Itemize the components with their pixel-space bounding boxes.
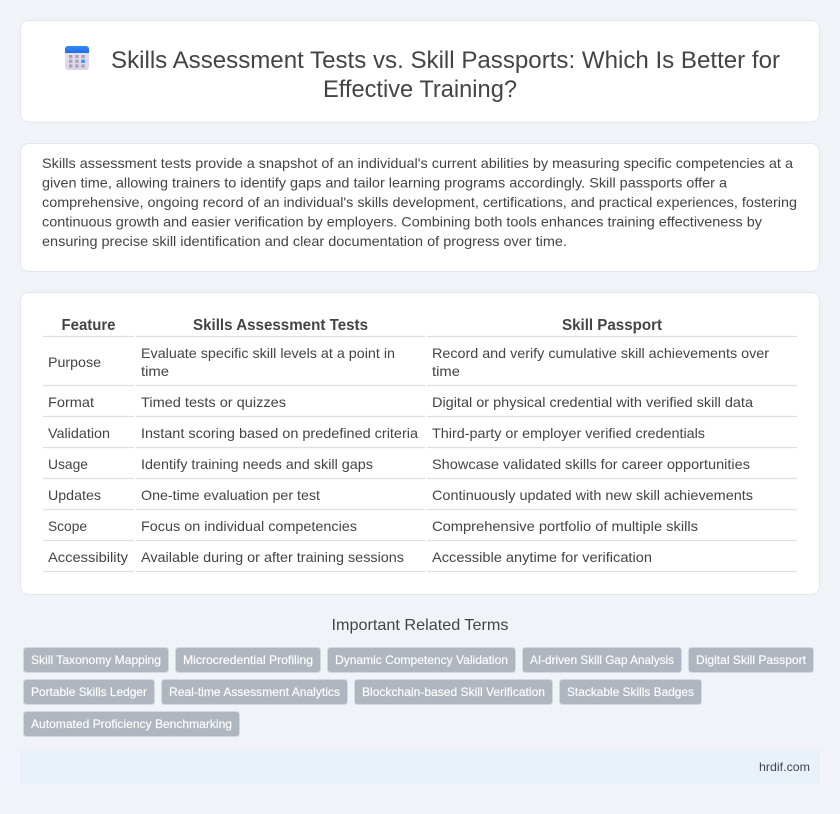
related terms tags: Real-time Assessment Analytics: [169, 685, 340, 699]
table header row: Skill Passport: [562, 317, 662, 334]
row: format: Digital or physical credential with verified skill data: [432, 394, 753, 410]
intro paragraph: comprehensive, ongoing record of an individual's skills development, certifications, and practical experiences, fostering: [42, 194, 797, 210]
row: updates: Continuously updated with new skill achievements: [432, 487, 753, 503]
row: scope: Comprehensive portfolio of multiple skills: [432, 518, 698, 534]
row: accessibility: Available during or after training sessions: [141, 549, 404, 565]
row: scope: [48, 518, 698, 534]
row: format: Timed tests or quizzes: [141, 394, 286, 410]
related terms tags: Stackable Skills Badges: [567, 685, 694, 699]
intro paragraph: continuous growth and easier verification by employers. Combining both tools enhances training effectiveness by: [42, 214, 762, 230]
related terms tags: Skill Taxonomy Mapping: [31, 653, 161, 667]
row: usage: Usage: [48, 456, 88, 472]
related terms tags: Portable Skills Ledger: [31, 685, 147, 699]
row: updates: [48, 487, 753, 503]
related terms heading: Important Related Terms: [332, 617, 508, 634]
row: updates: Updates: [48, 487, 101, 503]
row: updates: One-time evaluation per test: [141, 487, 320, 503]
table header row: Skills Assessment Tests: [193, 317, 368, 334]
related terms tags: Dynamic Competency Validation: [335, 653, 508, 667]
title: Effective Training?: [323, 76, 517, 103]
row: purpose: time: [432, 363, 460, 379]
row: purpose: Record and verify cumulative skill achievements over: [432, 345, 769, 361]
row: format: Format: [48, 394, 94, 410]
intro text panel: [20, 144, 820, 272]
related terms tags: AI-driven Skill Gap Analysis: [530, 653, 674, 667]
row: accessibility: Accessibility: [48, 549, 128, 565]
footer source: hrdif.com: [759, 760, 810, 774]
title: Skills Assessment Tests vs. Skill Passports: Which Is Better for: [111, 47, 780, 74]
intro paragraph: ensuring precise skill identification and clear documentation of progress over time.: [42, 233, 567, 249]
row: purpose: time: [141, 363, 169, 379]
row: validation: Instant scoring based on predefined criteria: [141, 425, 418, 441]
row: format: [48, 394, 753, 410]
row: scope: Focus on individual competencies: [141, 518, 357, 534]
related terms tags: Blockchain-based Skill Verification: [362, 685, 545, 699]
row: usage: Identify training needs and skill gaps: [141, 456, 373, 472]
icon: calendar: [65, 46, 89, 70]
related terms tags: Digital Skill Passport: [696, 653, 807, 667]
intro paragraph: [42, 155, 797, 249]
row: usage: Showcase validated skills for career opportunities: [432, 456, 750, 472]
table header row: Feature: [62, 317, 116, 334]
row: purpose: Purpose: [48, 354, 101, 370]
row: accessibility: Accessible anytime for verification: [432, 549, 652, 565]
related terms tags: Microcredential Profiling: [183, 653, 313, 667]
header panel: [20, 20, 820, 122]
footer bar: [20, 750, 820, 784]
comparison table panel: [20, 292, 820, 594]
table header row: [62, 317, 662, 334]
row: purpose: Evaluate specific skill levels at a point in: [141, 345, 395, 361]
related terms tags: [24, 648, 814, 736]
row: validation: [48, 425, 705, 441]
intro paragraph: given time, allowing trainers to identify gaps and tailor learning programs accordingly. Skill passports offer a: [42, 174, 727, 190]
row: validation: Third-party or employer verified credentials: [432, 425, 705, 441]
title: [111, 47, 780, 103]
row: validation: Validation: [48, 425, 110, 441]
intro paragraph: Skills assessment tests provide a snapshot of an individual's current abilities by measuring specific competencies at a: [42, 155, 793, 171]
related terms tags: Automated Proficiency Benchmarking: [31, 717, 232, 731]
row: scope: Scope: [48, 518, 87, 534]
row: usage: [48, 456, 750, 472]
row: accessibility: [48, 549, 652, 565]
row: purpose: [48, 345, 769, 379]
